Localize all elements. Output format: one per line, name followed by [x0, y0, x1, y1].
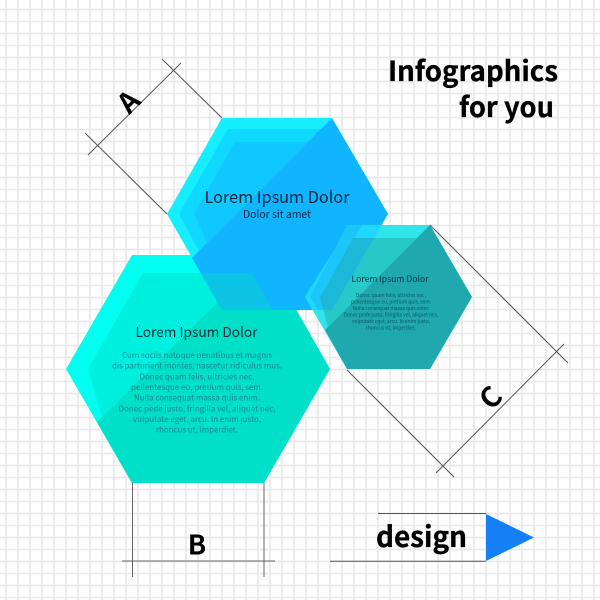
small hexagon body text: pellentesque eu, pretium quis, sem. — [351, 298, 431, 305]
title: for you — [459, 85, 554, 125]
hexagon B: large teal — [66, 255, 330, 483]
design label: design — [376, 515, 467, 556]
overlap with large hexagon — [201, 273, 273, 310]
large hexagon body text: Donec pede justo, fringilla vel, aliquet nec, — [118, 404, 276, 414]
small hexagon body text: Nulla consequat massa quis enim. — [352, 305, 430, 312]
label B: B — [188, 524, 206, 562]
label A: A — [107, 80, 149, 122]
title: Infographics — [388, 49, 558, 89]
small hexagon body text: rhoncus ut, imperdiet. — [366, 324, 416, 331]
large hexagon body text: Cum sociis natoque penatibus et magnis — [122, 350, 272, 361]
dimension B — [122, 483, 275, 577]
small hexagon body text: Donec quam felis, ultricies nec, — [356, 292, 427, 299]
large hexagon body text: Donec quam felis, ultricies nec, — [140, 372, 254, 382]
title — [388, 49, 558, 125]
small hexagon body text: Donec pede justo, fringilla vel, aliquet nec, — [344, 311, 439, 318]
dimension A — [85, 59, 222, 214]
label C: C — [469, 376, 511, 418]
large hexagon heading: Lorem Ipsum Dolor — [136, 321, 258, 341]
design arrow — [330, 514, 534, 561]
large hexagon body text — [112, 350, 282, 436]
top hexagon subheading: Dolor sit amet — [243, 206, 311, 221]
small hexagon body text: vulputate eget, arcu. In enim justo, — [352, 318, 431, 325]
top hexagon heading: Lorem Ipsum Dolor — [204, 184, 350, 208]
dimension C — [347, 225, 568, 477]
large hexagon body text: Nulla consequat massa quis enim. — [134, 392, 260, 404]
large hexagon body text: pellentesque eu, pretium quis, sem. — [131, 382, 263, 393]
hexagon C: small dark teal — [305, 225, 472, 369]
hexagon A: top blue — [167, 118, 388, 310]
large hexagon body text: rhoncus ut, imperdiet. — [156, 424, 238, 436]
small hexagon heading: Lorem Ipsum Dolor — [352, 273, 429, 285]
large hexagon body text: dis parturient montes, nascetur ridiculus mus. — [112, 360, 282, 372]
arrow head — [486, 514, 534, 561]
small hexagon body text — [344, 292, 439, 331]
large hexagon body text: vulputate eget, arcu. In enim justo, — [133, 414, 261, 425]
